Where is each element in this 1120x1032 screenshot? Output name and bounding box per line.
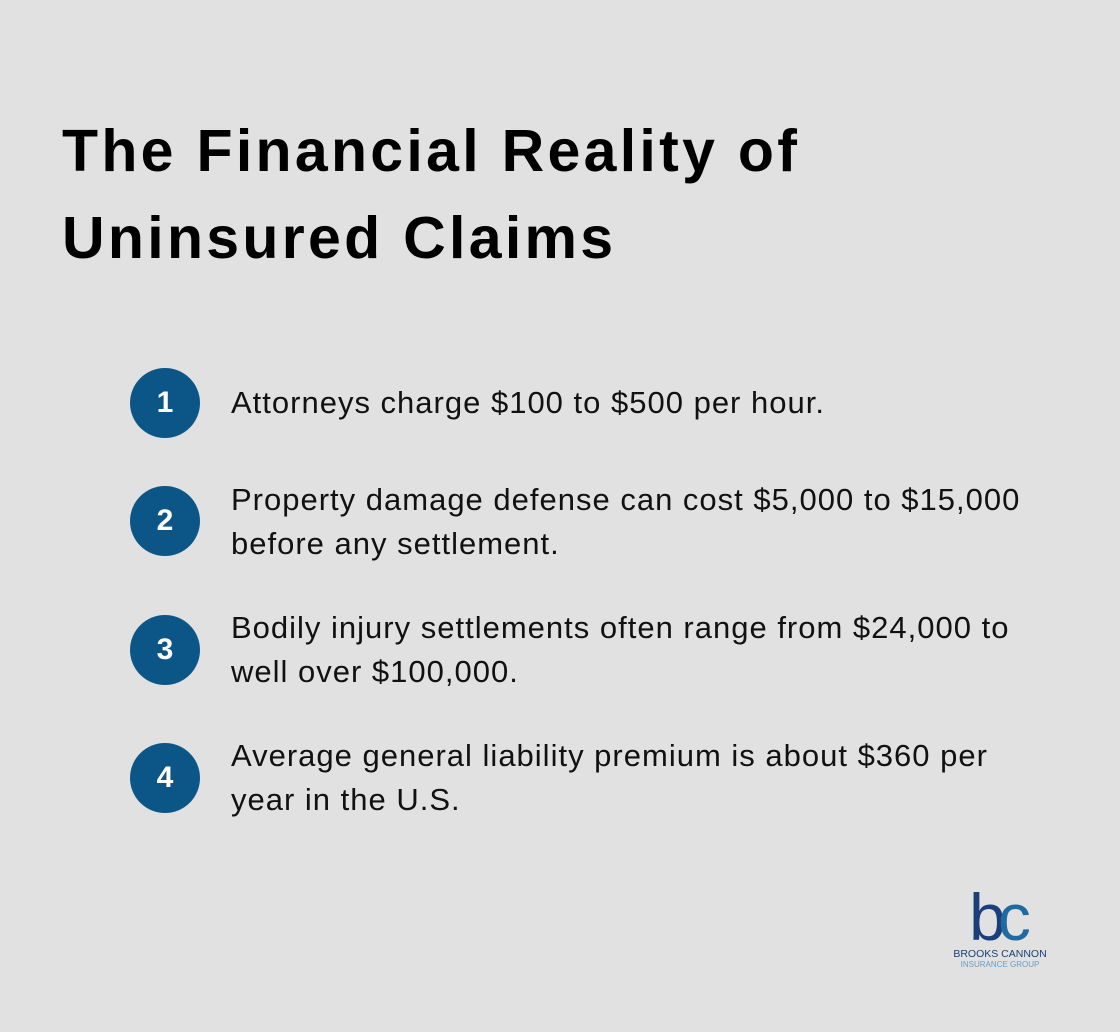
item 3 <box>130 610 1009 689</box>
title: The Financial Reality of <box>62 118 800 184</box>
badge 3 <box>130 615 200 685</box>
item 1 <box>130 368 825 438</box>
text 2: Property damage defense can cost $5,000 to $15,000 <box>231 482 1020 517</box>
logo <box>953 880 1047 969</box>
item 2 <box>130 482 1020 561</box>
item 4 <box>130 738 988 817</box>
text 3 <box>231 610 1009 689</box>
logo mark: bc <box>969 880 1023 954</box>
text 4 <box>231 738 988 817</box>
badge 4 <box>130 743 200 813</box>
badge 2: 2 <box>157 504 173 537</box>
text 3: well over $100,000. <box>231 654 519 689</box>
badge 4: 4 <box>157 761 173 794</box>
text 4: Average general liability premium is about $360 per <box>231 738 988 773</box>
text 1: Attorneys charge $100 to $500 per hour. <box>231 385 825 420</box>
logo text: BROOKS CANNON <box>953 948 1047 960</box>
title <box>62 118 800 271</box>
badge 3: 3 <box>157 633 173 666</box>
badge 1: 1 <box>157 386 173 419</box>
badge 2 <box>130 486 200 556</box>
text 2 <box>231 482 1020 561</box>
text 4: year in the U.S. <box>231 782 461 817</box>
text 3: Bodily injury settlements often range from $24,000 to <box>231 610 1009 645</box>
badge 1 <box>130 368 200 438</box>
title: Uninsured Claims <box>62 205 616 271</box>
text 2: before any settlement. <box>231 526 560 561</box>
logo: INSURANCE GROUP <box>961 960 1039 969</box>
